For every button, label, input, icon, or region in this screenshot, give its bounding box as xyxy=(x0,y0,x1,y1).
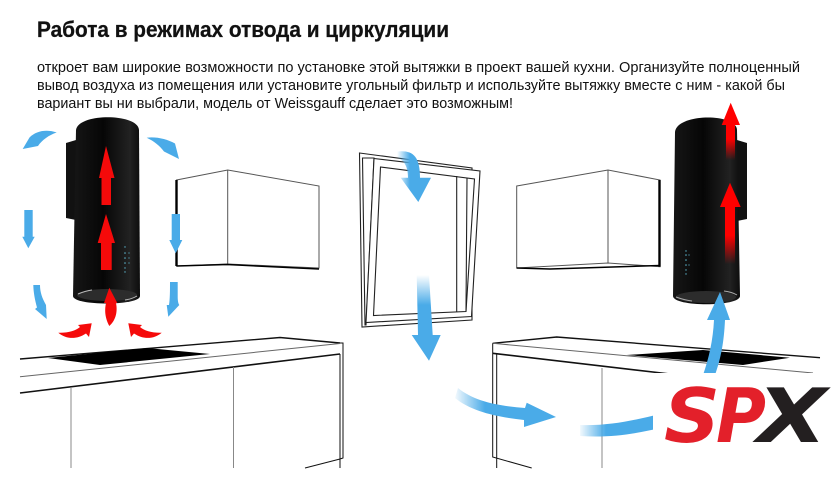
icon: right cooktop xyxy=(627,350,790,365)
icon: right cylindrical hood xyxy=(673,117,747,304)
logo: SPX xyxy=(664,372,831,460)
panel: right kitchen counter xyxy=(493,337,820,468)
intro text block: вариант вы ни выбрали, модель от Weissgauff сделает это возможным! xyxy=(37,96,513,112)
arrow: air up into right hood xyxy=(703,292,730,375)
intro text block xyxy=(37,60,800,112)
arrows: red intake inside left hood xyxy=(58,146,162,338)
panel: tilted window xyxy=(360,153,480,327)
logo backdrop xyxy=(653,373,840,489)
arrow: air into kitchen under window xyxy=(455,388,556,427)
arrows: blue circulation around left hood xyxy=(22,131,182,319)
intro text block: вывод воздуха из помещения или установите угольный фильтр и используйте вытяжку вместе с ним - какой бы xyxy=(37,78,785,94)
logo: SPX: X xyxy=(752,372,831,460)
panel: right wall cabinet xyxy=(517,170,660,269)
arrow: air down from window xyxy=(412,275,441,361)
icon: left cooktop xyxy=(48,348,210,365)
logo: SPX: S xyxy=(664,372,720,460)
title: Работа в режимах отвода и циркуляции xyxy=(37,17,449,42)
panel: left kitchen counter xyxy=(20,338,343,468)
arrow: air toward right hood xyxy=(580,414,660,437)
intro text block: откроет вам широкие возможности по установке этой вытяжки в проект вашей кухни. Организуйте полноценный xyxy=(37,60,800,76)
logo: SPX: P xyxy=(716,372,766,460)
icon: left cylindrical hood xyxy=(66,117,140,304)
panel: left wall cabinet xyxy=(176,170,319,269)
arrows: red exhaust on right hood xyxy=(720,103,741,264)
arrow: air through top of window xyxy=(397,151,431,202)
